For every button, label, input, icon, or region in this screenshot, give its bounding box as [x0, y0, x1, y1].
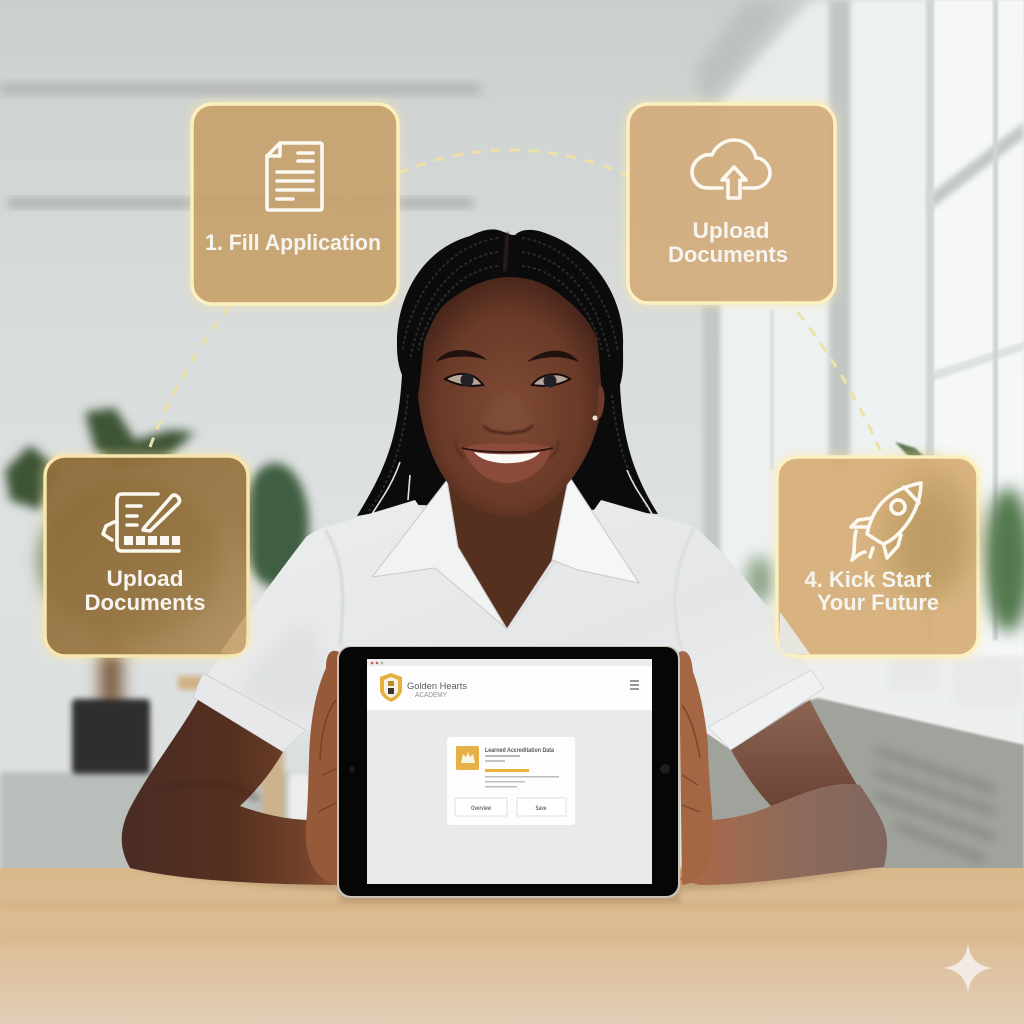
site header: ACADEMY: [415, 690, 447, 699]
neck: [447, 476, 569, 628]
site header: [367, 666, 652, 710]
icon: cloud upload: [692, 140, 770, 198]
hair part: [504, 233, 508, 272]
cornrow braid texture: [368, 238, 650, 512]
icon: rocket: [851, 483, 921, 560]
student: [122, 229, 887, 886]
braid gaps: [372, 462, 652, 514]
label: fill application: 1. Fill Application: [205, 230, 381, 255]
tablet camera dots: [349, 766, 355, 772]
site header: Golden Hearts: [407, 681, 467, 692]
face: [418, 277, 602, 517]
shirt torso and sleeves: [193, 500, 824, 760]
floor: [0, 772, 340, 872]
tablet screen: [367, 659, 652, 884]
right arm upper: [731, 700, 860, 806]
right plant: [746, 460, 1024, 632]
left hand: [306, 651, 340, 886]
right collar: [552, 476, 639, 583]
card: step 2 upload documents: Documents: [668, 242, 788, 267]
card: step 4 kick start your future: [777, 457, 978, 656]
admission card: Overview: [471, 806, 491, 812]
nose: [484, 395, 532, 433]
shirt folds: [325, 530, 343, 646]
dashed connector arc: [150, 150, 880, 450]
smile: [463, 443, 552, 483]
icon: form and pencil: [103, 494, 180, 551]
admission card: [447, 737, 575, 825]
card: step 1 fill application: [192, 104, 398, 304]
card: step 2 upload documents: [628, 104, 835, 303]
table: [0, 868, 1024, 1024]
back hair: [357, 229, 658, 516]
left collar: [372, 480, 506, 628]
icon: document: [267, 143, 322, 210]
tablet: [337, 646, 680, 898]
label: upload documents: Upload: [692, 218, 770, 243]
radiator: [700, 698, 1024, 870]
admission card: Learned Accreditation Data: [485, 748, 555, 754]
left arm: [122, 700, 340, 885]
card: step 3 upload documents: Documents: [84, 590, 206, 615]
admission card: Save: [536, 806, 547, 812]
right sleeve cuff: [708, 670, 824, 750]
label: kick start your future: 4. Kick Start: [804, 567, 932, 592]
ear and earring: [596, 385, 605, 420]
window sill and pots: [700, 656, 1024, 745]
label: upload documents: Upload: [106, 566, 184, 591]
card: step 4 kick start your future: Your Future: [817, 590, 939, 615]
left plant: [5, 408, 309, 587]
eyebrows: [436, 350, 487, 362]
left sleeve cuff: [193, 673, 306, 752]
window wall: [722, 0, 1024, 720]
right hand: [679, 651, 713, 885]
right arm lower: [680, 784, 887, 885]
eyes: [445, 374, 483, 386]
card: step 3 upload documents: [45, 456, 248, 656]
sparkle icon: [944, 944, 992, 992]
